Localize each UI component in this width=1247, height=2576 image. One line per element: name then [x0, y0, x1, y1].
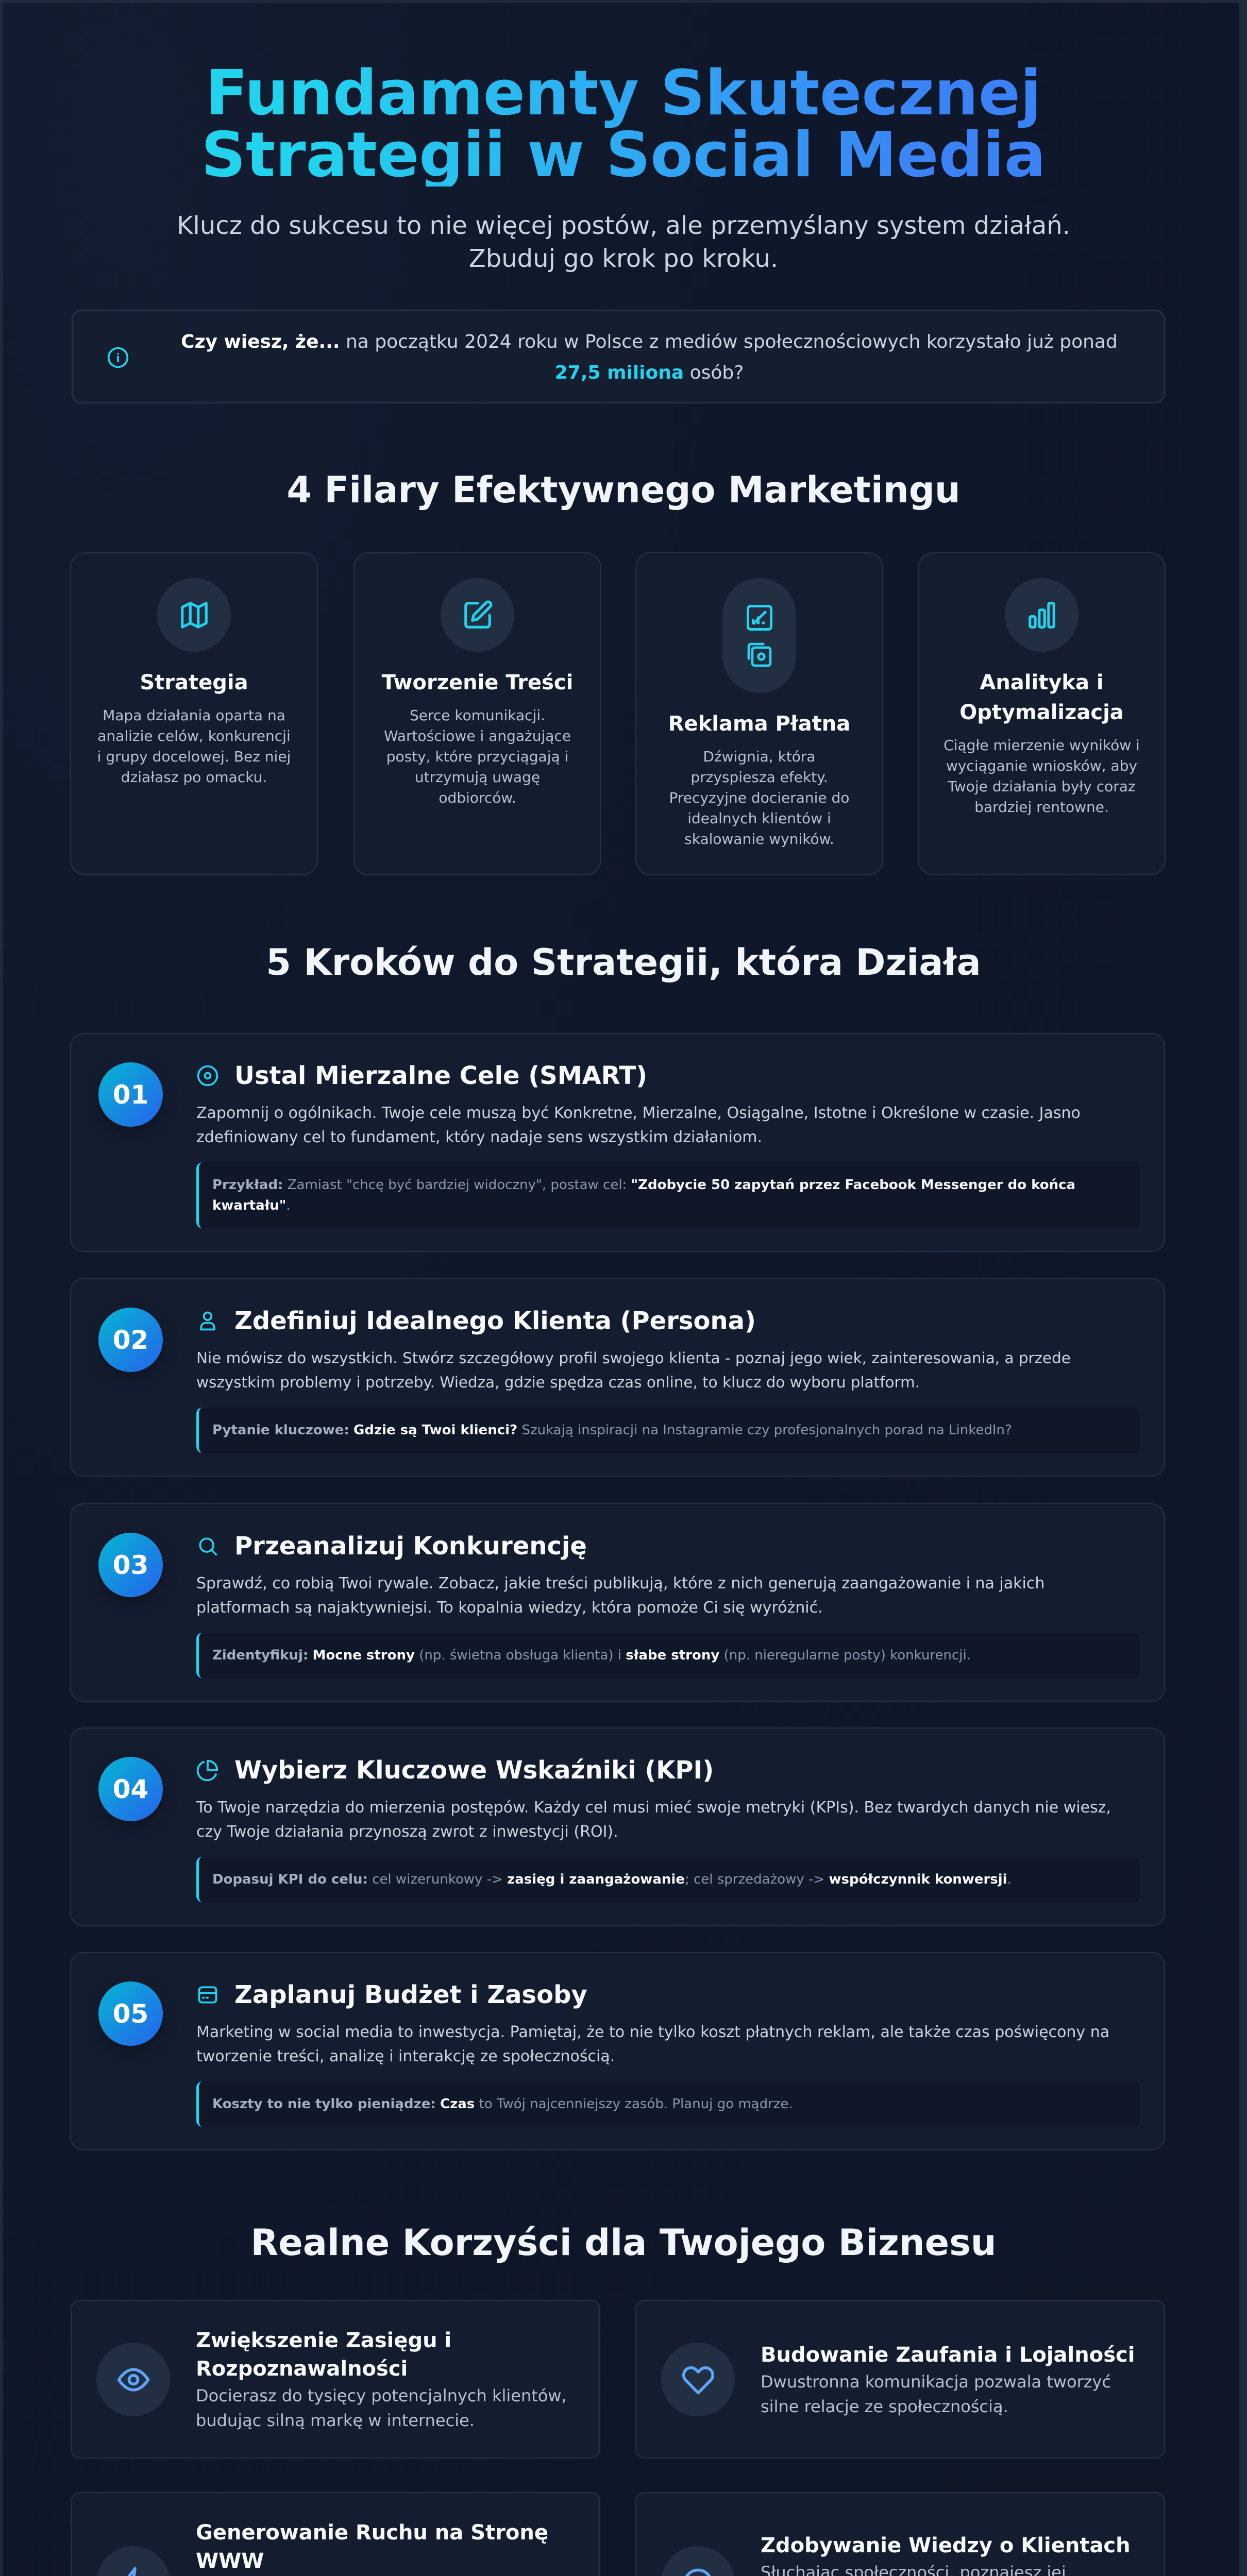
benefit text: Zwiększenie Zasięgu i Rozpoznawalności	[196, 2329, 451, 2381]
step number: 04	[113, 1774, 148, 1804]
callout: Zidentyfikuj: Mocne strony (np. świetna obsługa klienta) i słabe strony (np. nieregularne posty) konkurencji.	[212, 1648, 971, 1663]
callout	[196, 2081, 1140, 2127]
panel: benefit reach	[71, 2300, 600, 2459]
step title: Wybierz Kluczowe Wskaźniki (KPI)	[234, 1756, 714, 1785]
callout	[196, 1857, 1140, 1902]
title: Fundamenty Skutecznej	[206, 58, 1041, 129]
callout	[196, 1162, 1140, 1228]
benefit text	[761, 2343, 1135, 2416]
pillar title: Reklama Płatna	[668, 712, 850, 736]
subtitle	[177, 211, 1070, 273]
callout: Koszty to nie tylko pieniądze: Czas to Twój najcenniejszy zasób. Planuj go mądrze.	[212, 2096, 793, 2112]
icon: bar chart	[1005, 578, 1079, 652]
panel: pillar reklama	[635, 552, 883, 875]
icon: ads	[722, 578, 796, 693]
step number	[98, 1308, 163, 1372]
panel: pillar tworzenie tresci	[353, 552, 601, 875]
step number: 03	[113, 1550, 148, 1580]
info box: did you know	[72, 310, 1165, 403]
title	[0, 63, 1247, 187]
step text: Marketing w social media to inwestycja. Pamiętaj, że to nie tylko koszt płatnych reklam, ale także czas poświęcony na tworzenie treści, analizę i interakcję ze społecznością.	[196, 2023, 1109, 2065]
info text	[181, 331, 1118, 383]
step number	[98, 1981, 163, 2046]
panel: benefit traffic	[71, 2492, 600, 2576]
pillar title: Strategia	[140, 671, 248, 694]
pillar text: Dźwignia, która przyspiesza efekty. Precyzyjne docieranie do idealnych klientów i skalowanie wyników.	[669, 748, 849, 848]
icon: chat	[661, 2546, 735, 2576]
step number	[98, 1533, 163, 1597]
panel: step 05	[70, 1952, 1165, 2150]
callout: Przykład: Zamiast "chcę być bardziej widoczny", postaw cel: "Zdobycie 50 zapytań przez Facebook Messenger do końca kwartału".	[212, 1177, 1075, 1213]
step number	[98, 1062, 163, 1127]
step text: Sprawdź, co robią Twoi rywale. Zobacz, jakie treści publikują, które z nich generują zaangażowanie i na jakich platformach są najaktywniejsi. To kopalnia wiedzy, która pomoże Ci się wyróżnić.	[196, 1574, 1044, 1617]
step title: Zaplanuj Budżet i Zasoby	[234, 1980, 587, 2009]
benefit text: Dwustronna komunikacja pozwala tworzyć silne relacje ze społecznością.	[761, 2372, 1111, 2416]
benefit text: Budowanie Zaufania i Lojalności	[761, 2343, 1135, 2367]
pillar title: Analityka i Optymalizacja	[959, 671, 1124, 724]
panel: pillar analityka	[918, 552, 1166, 875]
benefit text	[761, 2534, 1131, 2576]
subtitle: Klucz do sukcesu to nie więcej postów, ale przemyślany system działań.	[177, 211, 1070, 240]
pillar text: Serce komunikacji. Wartościowe i angażujące posty, które przyciągają i utrzymują uwagę odbiorców.	[384, 707, 571, 806]
callout: Dopasuj KPI do celu: cel wizerunkowy -> zasięg i zaangażowanie; cel sprzedażowy -> współczynnik konwersji.	[212, 1872, 1012, 1887]
icon: edit	[441, 578, 514, 652]
benefit text: Docierasz do tysięcy potencjalnych klientów, budując silną markę w internecie.	[196, 2386, 567, 2430]
pillar title: Tworzenie Treści	[382, 671, 573, 694]
heading: 5 steps: 5 Kroków do Strategii, która Działa	[266, 941, 981, 984]
step number: 01	[113, 1080, 148, 1110]
panel: step 04	[70, 1727, 1165, 1926]
info text: 27,5 miliona osób?	[555, 362, 744, 383]
icon: lightning	[96, 2546, 170, 2576]
subtitle: Zbuduj go krok po kroku.	[469, 244, 778, 273]
heading: 4 pillars: 4 Filary Efektywnego Marketingu	[287, 469, 960, 511]
step number	[98, 1757, 163, 1821]
panel: step 01	[70, 1033, 1165, 1252]
step title: Przeanalizuj Konkurencję	[234, 1532, 587, 1561]
callout: Pytanie kluczowe: Gdzie są Twoi klienci? Szukają inspiracji na Instagramie czy profesjonalnych porad na LinkedIn?	[212, 1422, 1012, 1438]
panel: step 03	[70, 1503, 1165, 1702]
step text: To Twoje narzędzia do mierzenia postępów. Każdy cel musi mieć swoje metryki (KPIs). Bez twardych danych nie wiesz, czy Twoje działania przynoszą zwrot z inwestycji (ROI).	[196, 1799, 1111, 1841]
step title: Ustal Mierzalne Cele (SMART)	[234, 1061, 647, 1090]
step text: Nie mówisz do wszystkich. Stwórz szczegółowy profil swojego klienta - poznaj jego wiek, zainteresowania, a przede wszystkim problemy i potrzeby. Wiedza, gdzie spędza czas online, to klucz do wyboru platform.	[196, 1349, 1071, 1391]
title: Strategii w Social Media	[201, 120, 1046, 191]
panel: step 02	[70, 1278, 1165, 1477]
heading: benefits: Realne Korzyści dla Twojego Biznesu	[250, 2222, 997, 2264]
callout	[196, 1633, 1140, 1678]
pillar text: Mapa działania oparta na analizie celów, konkurencji i grupy docelowej. Bez niej działasz po omacku.	[97, 707, 291, 786]
step number: 02	[113, 1325, 148, 1355]
callout	[196, 1408, 1140, 1453]
icon: heart	[661, 2343, 735, 2416]
panel: benefit trust	[635, 2300, 1165, 2459]
info text: Czy wiesz, że... na początku 2024 roku w Polsce z mediów społecznościowych korzystało już ponad	[181, 331, 1118, 352]
step title: Zdefiniuj Idealnego Klienta (Persona)	[234, 1307, 756, 1335]
benefit text: Generowanie Ruchu na Stronę WWW	[196, 2521, 548, 2573]
icon: map	[157, 578, 231, 652]
panel: benefit knowledge	[635, 2492, 1165, 2576]
step number: 05	[113, 1999, 148, 2029]
icon: eye	[96, 2343, 170, 2416]
benefit text: Zdobywanie Wiedzy o Klientach	[761, 2534, 1131, 2557]
pillar text: Ciągłe mierzenie wyników i wyciąganie wniosków, aby Twoje działania były coraz bardziej rentowne.	[943, 737, 1140, 816]
icon: info	[107, 347, 129, 368]
step text: Zapomnij o ogólnikach. Twoje cele muszą być Konkretne, Mierzalne, Osiągalne, Istotne i Określone w czasie. Jasno zdefiniowany cel to fundament, który nadaje sens wszystkim działaniom.	[196, 1104, 1081, 1146]
panel: pillar strategia	[70, 552, 318, 875]
benefit text	[196, 2329, 567, 2430]
